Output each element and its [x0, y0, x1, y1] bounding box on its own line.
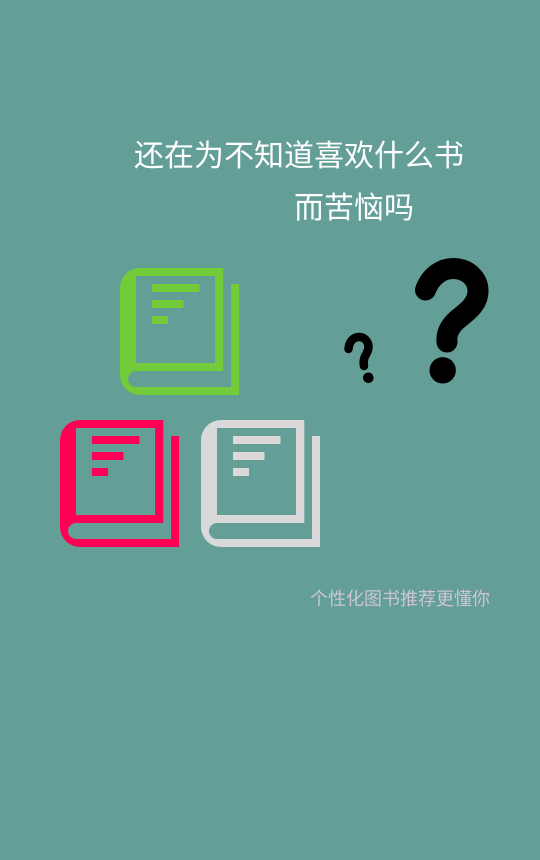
icon: large question mark — [415, 258, 488, 384]
icon: red book — [60, 420, 179, 547]
title line 1: 还在为不知道喜欢什么书 — [134, 140, 464, 173]
icon: green book — [120, 268, 239, 395]
icon: small question mark — [344, 332, 374, 384]
icon: grey book — [201, 420, 320, 547]
title line 2: 而苦恼吗 — [294, 192, 414, 225]
tagline: 个性化图书推荐更懂你 — [310, 589, 490, 609]
